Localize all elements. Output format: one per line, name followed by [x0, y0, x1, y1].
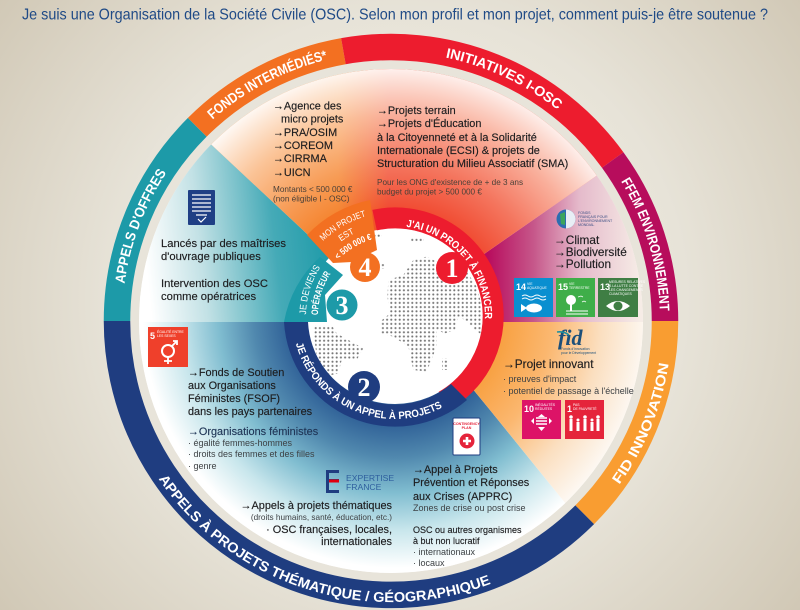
panel: FFEM environnement: →Biodiversité: [554, 245, 627, 259]
hub banner: je deviens opérateur: 3: [336, 291, 348, 320]
globe: [308, 228, 483, 404]
panel: APPRC text: · internationaux: [413, 547, 476, 557]
ring segment: appels d'offres: APPELS D'OFFRES: [116, 169, 166, 284]
icon: SDG 14: AQUATIQUE: [527, 286, 547, 290]
panel: fonds intermédiés text: →UICN: [273, 167, 311, 179]
panel: FID innovation: · preuves d'impact: [503, 374, 577, 384]
ring segment: initiatives I-OSC: INITIATIVES I-OSC: [446, 48, 562, 108]
panel: initiatives I-OSC text: Pour les ONG d'existence de + de 3 ans: [377, 178, 523, 187]
panel: FFEM environnement: →Pollution: [554, 257, 611, 271]
panel: fonds intermédiés text: →Agence des: [273, 100, 342, 112]
icon: SDG 14: VIE: [527, 282, 533, 286]
panel: initiatives I-OSC text: [377, 105, 568, 196]
logo: FFEM: [556, 210, 613, 228]
hub banner: je deviens opérateur: JE DEVIENS: [300, 265, 320, 314]
panel: appels d'offres text: [161, 190, 286, 303]
icon: SDG 13: [598, 278, 646, 317]
icon: SDG 15: [556, 278, 595, 317]
hub banner: mon projet est < 500 000 €: 4: [358, 253, 372, 282]
icon: contingency plan: [453, 418, 480, 455]
hub arc: je réponds à un appel à projets: [284, 322, 467, 427]
panel: expertise france: [241, 470, 394, 548]
hub banner: mon projet est < 500 000 €: EST: [338, 228, 353, 242]
panel: FSOF text: dans les pays partenaires: [188, 406, 313, 418]
icon: SDG 5: LES SEXES: [157, 334, 176, 338]
panel: APPRC text: aux Crises (APPRC): [413, 491, 512, 503]
hub arc: je réponds à un appel à projets: 2: [358, 373, 370, 402]
ring segment: fonds intermédiés: FONDS INTERMÉDIÉS*: [206, 50, 326, 120]
panel: fonds intermédiés text: [273, 100, 353, 204]
icon: SDG 5: [148, 327, 188, 367]
icon: SDG 15: VIE: [569, 282, 575, 286]
hub arc: je réponds à un appel à projets: JE RÉPONDS À UN APPEL À PROJETS: [296, 343, 442, 419]
panel: FID innovation: [503, 325, 634, 439]
panel: FSOF text: · égalité femmes-hommes: [188, 438, 293, 448]
panel: FFEM environnement: [514, 210, 646, 317]
hub banner: je deviens opérateur: OPÉRATEUR: [310, 271, 331, 315]
panel: fonds intermédiés text: Montants < 500 000 €: [273, 185, 353, 194]
panel: APPRC text: à but non lucratif: [413, 536, 480, 546]
icon: SDG 1: 1: [567, 404, 572, 414]
panel: fonds intermédiés text: (non éligible I - OSC): [273, 194, 350, 204]
icon: contingency plan: CONTINGENCY: [453, 422, 480, 426]
panel: APPRC text: OSC ou autres organismes: [413, 525, 522, 535]
icon: SDG 14: [514, 278, 553, 317]
icon: contingency plan: PLAN: [462, 426, 472, 430]
icon: SDG 14: 14: [516, 282, 526, 292]
logo: expertise france: EXPERTISE: [346, 473, 394, 483]
hub banner: mon projet est < 500 000 €: [307, 200, 380, 282]
icon: SDG 10: INÉGALITÉS: [535, 402, 556, 407]
panel: FSOF text: →Organisations féministes: [188, 426, 319, 438]
wedge disk: [139, 69, 643, 573]
panel: initiatives I-OSC text: →Projets d'Éducation: [377, 117, 481, 130]
logo: fid: pour le Développement: [561, 351, 596, 355]
icon: SDG 13: CLIMATIQUES: [609, 292, 632, 296]
icon: SDG 13: 13: [600, 282, 610, 292]
panel: FSOF text: →Fonds de Soutien: [188, 367, 284, 379]
icon: SDG 10: RÉDUITES: [535, 406, 553, 411]
icon: SDG 10: [522, 400, 561, 439]
logo: FFEM: MONDIAL: [578, 223, 594, 227]
hub banner: mon projet est < 500 000 €: < 500 000 €: [336, 234, 372, 258]
icon: SDG 13: MESURES RELATIVES: [609, 280, 646, 284]
panel: appels d'offres text: d'ouvrage publiques: [161, 251, 261, 263]
panel: initiatives I-OSC text: Structuration du Milieu Associatif (SMA): [377, 158, 568, 170]
logo: expertise france: FRANCE: [346, 482, 382, 492]
logo: fid: fid: [558, 325, 583, 350]
hub arc: j'ai un projet à financer: J'AI UN PROJET À FINANCER: [406, 220, 492, 319]
panel: expertise france: (droits humains, santé, éducation, etc.): [251, 513, 392, 522]
ring segment: appels à projets thématique / géographique: [104, 321, 594, 608]
panel: APPRC text: · locaux: [413, 558, 445, 568]
logo: expertise france: [326, 470, 394, 493]
panel: fonds intermédiés text: →CIRRMA: [273, 153, 328, 165]
hub banner: mon projet est < 500 000 €: MON PROJET: [319, 210, 364, 241]
logo: FFEM: FONDS: [578, 211, 591, 215]
ring segment: fonds intermédiés: [188, 38, 346, 137]
icon: SDG 1: [565, 400, 604, 439]
panel: appels d'offres text: comme opératrices: [161, 291, 257, 303]
panel: APPRC text: →Appel à Projets: [413, 464, 498, 476]
panel: expertise france: →Appels à projets thématiques: [241, 500, 393, 512]
outer ring with category labels: [104, 34, 678, 608]
panel: initiatives I-OSC text: à la Citoyenneté et à la Solidarité: [377, 132, 537, 144]
panel: expertise france: internationales: [321, 536, 393, 548]
logo: fid: [557, 325, 596, 355]
icon: SDG 13: À LA LUTTE CONTRE: [609, 284, 644, 288]
icon: SDG 5: ÉGALITÉ ENTRE: [157, 329, 184, 334]
panel: appels d'offres text: Intervention des OSC: [161, 278, 268, 290]
ring segment: FID innovation: FID INNOVATION: [612, 363, 668, 484]
panel: appels d'offres text: Lancés par des maîtrises: [161, 238, 286, 250]
logo: fid: Fonds d'Innovation: [561, 347, 590, 351]
ring segment: FID innovation: [575, 321, 678, 524]
icon: SDG 10: 10: [524, 404, 534, 414]
panel: FSOF text: aux Organisations: [188, 380, 276, 392]
icon: SDG 13: LES CHANGEMENTS: [609, 288, 643, 292]
ring segment: initiatives I-OSC: [341, 34, 624, 168]
logo: FFEM: FRANÇAIS POUR: [578, 215, 608, 219]
ring segment: appels à projets thématique / géographique: APPELS À PROJETS THÉMATIQUE / GÉOGRAPHIQUE: [158, 476, 490, 602]
panel: fonds intermédiés text: micro projets: [281, 114, 344, 126]
icon: SDG 1: PAS: [573, 403, 580, 407]
panel: APPRC text: Zones de crise ou post crise: [413, 503, 526, 513]
hub banner: je deviens opérateur: [284, 258, 358, 322]
panel: fonds intermédiés text: →PRA/OSIM: [273, 127, 337, 139]
panel: fonds intermédiés text: →COREOM: [273, 140, 333, 152]
icon: document: [188, 190, 215, 225]
panel: FSOF text: · droits des femmes et des filles: [188, 449, 315, 459]
panel: FID innovation: · potentiel de passage à l'échelle: [503, 386, 634, 396]
hub arc: j'ai un projet à financer: [372, 207, 504, 398]
panel: initiatives I-OSC text: budget du projet > 500 000 €: [377, 188, 482, 196]
ring segment: FFEM environnement: FFEM ENVIRONNEMENT: [621, 177, 670, 311]
panel: APPRC text: [413, 418, 530, 568]
panel: FID innovation: →Projet innovant: [503, 357, 594, 371]
panel: FSOF text: · genre: [188, 461, 217, 471]
icon: SDG 1: DE PAUVRETÉ: [573, 406, 597, 411]
panel: initiatives I-OSC text: Internationale (ECSI) & projets de: [377, 145, 540, 157]
panel: initiatives I-OSC text: →Projets terrain: [377, 105, 456, 117]
icon: SDG 5: 5: [150, 331, 155, 341]
ring segment: appels d'offres: [104, 118, 207, 321]
ring segment: FFEM environnement: [602, 152, 678, 321]
hub arc: j'ai un projet à financer: 1: [446, 254, 458, 283]
icon: SDG 15: 15: [558, 282, 568, 292]
panel: expertise france: · OSC françaises, locales,: [266, 524, 392, 536]
panel: FSOF text: Féministes (FSOF): [188, 393, 280, 405]
panel: FSOF text: [148, 327, 319, 471]
panel: APPRC text: Prévention et Réponses: [413, 477, 530, 489]
icon: SDG 15: TERRESTRE: [569, 286, 590, 290]
logo: FFEM: L'ENVIRONNEMENT: [578, 219, 613, 223]
panel: FFEM environnement: →Climat: [554, 233, 600, 247]
